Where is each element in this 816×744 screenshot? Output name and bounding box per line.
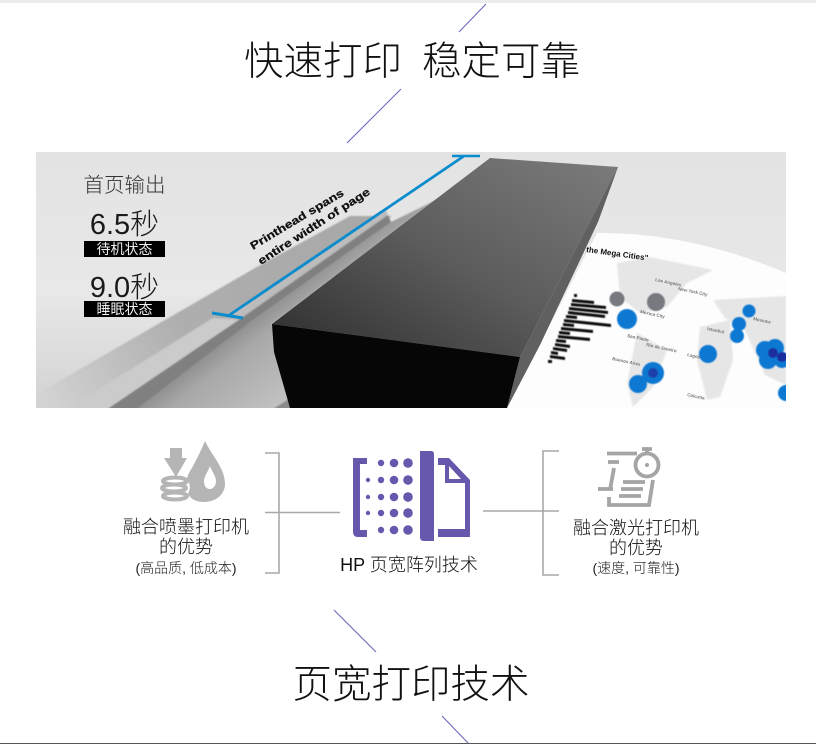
map city labels: Istanbul (707, 326, 725, 335)
stats heading: 首页输出 (84, 174, 166, 197)
ready label (84, 241, 165, 257)
left bracket connector (265, 452, 340, 574)
rotated printhead label: Printhead spans (248, 187, 346, 253)
rotated printhead label: entire width of page (256, 186, 372, 268)
sleep label (84, 301, 165, 317)
map city labels: Buenos Aires (612, 356, 642, 367)
icon: fast print stopwatch (598, 447, 660, 507)
map city labels: New York City (678, 286, 709, 297)
blue width arrow (212, 156, 480, 318)
bottom border (0, 743, 816, 744)
decorative title lines: bottom (334, 610, 469, 743)
image background (36, 152, 786, 408)
map title: the Mega Cities" (586, 245, 649, 263)
right caption: 融合激光打印机 (573, 518, 699, 538)
map city labels: Lagos (687, 352, 701, 360)
rail (30, 198, 440, 412)
map bar chart (548, 294, 611, 363)
left sub caption: (高品质, 低成本) (135, 560, 237, 576)
top border (0, 0, 816, 3)
stat: ready time: 6.5秒 (90, 209, 159, 241)
section title: page wide printing: 页宽打印技术 (292, 663, 530, 707)
title: fast printing: 稳定可靠 (422, 40, 580, 84)
right caption: 的优势 (609, 538, 663, 558)
left caption: 的优势 (159, 537, 213, 557)
decorative title lines: top (346, 4, 486, 144)
stat: sleep time: 9.0秒 (90, 272, 159, 304)
map city labels (612, 277, 772, 401)
map continents (617, 257, 713, 313)
left caption: 融合喷墨打印机 (123, 517, 249, 537)
first page out stats (84, 174, 166, 317)
icon: ink drop and coins (160, 441, 225, 502)
right bracket connector (483, 450, 559, 576)
icon: page wide array (353, 451, 470, 541)
map city labels: Moscow (753, 316, 772, 325)
ready label: 待机状态 (96, 241, 152, 257)
printhead block (272, 158, 618, 408)
map city labels: Mexico City (640, 309, 666, 319)
center caption: HP 页宽阵列技术 (340, 555, 478, 575)
map sheet (507, 233, 794, 408)
map bubbles (610, 292, 794, 401)
map city labels: Sao Paulo (627, 333, 649, 343)
right sub caption: (速度, 可靠性) (592, 560, 680, 576)
map city labels: Calcutta (687, 392, 706, 401)
map city labels: Rio de Janeiro (646, 342, 677, 353)
rotated printhead label (248, 186, 372, 268)
left caption (123, 517, 249, 557)
sleep label: 睡眠状态 (96, 301, 152, 317)
panel: printhead image (36, 152, 786, 408)
map city labels: Los Angeles (655, 277, 682, 288)
right caption (573, 518, 699, 558)
title: fast printing (244, 40, 580, 84)
title: fast printing: 快速打印 (244, 40, 402, 84)
